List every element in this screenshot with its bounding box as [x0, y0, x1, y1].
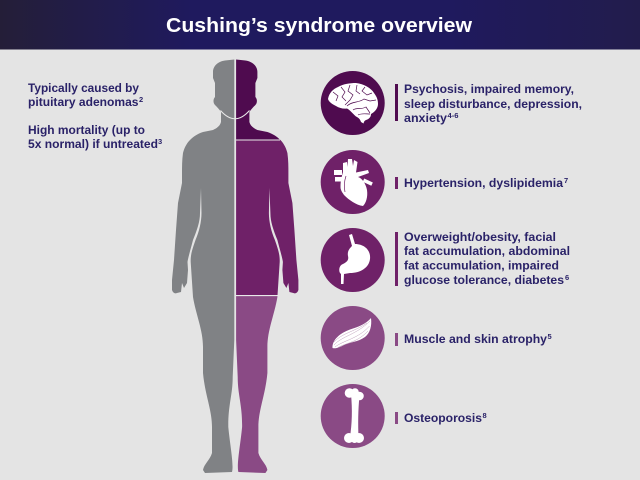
- text: psychiatric effects: anxiety: [404, 113, 448, 125]
- icon: muscle: [321, 306, 385, 370]
- text block: causes and mortality: Typically caused by: [28, 83, 140, 95]
- text: metabolic effects: Overweight/obesity, facial: [404, 232, 556, 244]
- coloured right half: [236, 60, 298, 473]
- icon: brain: [321, 71, 385, 135]
- icon: bone: [321, 384, 385, 448]
- text: psychiatric effects: sleep disturbance, depression,: [404, 99, 582, 111]
- text: psychiatric effects: 4-6: [448, 111, 458, 120]
- text block: causes and mortality: 3: [158, 137, 162, 146]
- text: psychiatric effects: Psychosis, impaired memory,: [404, 84, 574, 96]
- text block: causes and mortality: 5x normal) if untreated: [28, 139, 158, 151]
- text block: causes and mortality: pituitary adenomas: [28, 97, 138, 109]
- text: bone effects: [395, 411, 487, 425]
- text: muscle and skin: 5: [548, 332, 552, 341]
- text: metabolic effects: fat accumulation, impaired: [404, 260, 559, 272]
- icon: heart: [321, 150, 385, 214]
- grey left half: [172, 60, 234, 473]
- text: psychiatric effects: [395, 84, 582, 125]
- icon: stomach: [321, 228, 385, 292]
- header banner: [0, 0, 640, 50]
- title: Cushing’s syndrome overview: [166, 14, 472, 37]
- text: cardiovascular effects: Hypertension, dyslipidemia: [404, 178, 564, 190]
- text: metabolic effects: 6: [565, 273, 569, 282]
- text: metabolic effects: [395, 232, 570, 287]
- text: muscle and skin: Muscle and skin atrophy: [404, 334, 548, 346]
- text block: causes and mortality: [28, 83, 162, 151]
- text: cardiovascular effects: 7: [564, 176, 568, 185]
- text: bone effects: 8: [482, 411, 487, 420]
- text: metabolic effects: glucose tolerance, diabetes: [404, 275, 564, 287]
- text: metabolic effects: fat accumulation, abdominal: [404, 246, 570, 258]
- body figure: [172, 60, 298, 473]
- text block: causes and mortality: High mortality (up to: [28, 125, 145, 137]
- text block: causes and mortality: 2: [139, 95, 143, 104]
- text: bone effects: Osteoporosis: [404, 413, 482, 425]
